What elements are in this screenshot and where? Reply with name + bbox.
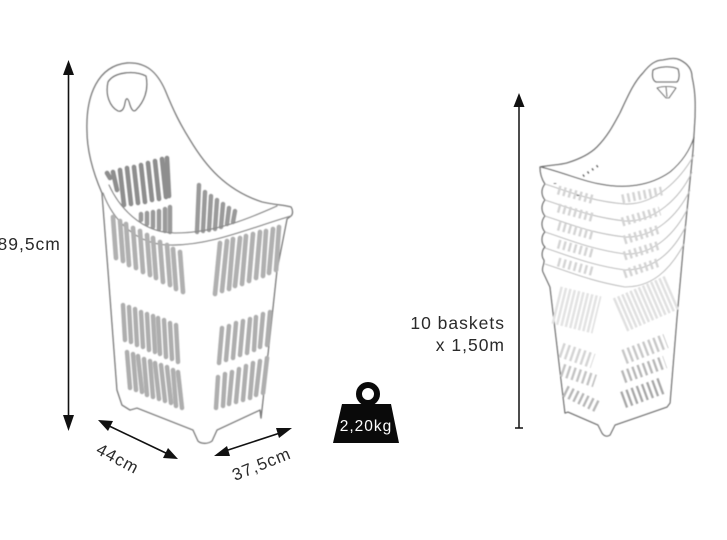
label: stack height: 10 baskets — [410, 313, 505, 333]
label: depth: 44cm — [93, 440, 142, 478]
icon: weight 2,20kg: 2,20kg — [340, 418, 392, 435]
slats: lower left row 3 — [565, 391, 598, 407]
icon: weight 2,20kg — [333, 385, 399, 443]
slats: rim rows — [558, 190, 662, 274]
label: width: 37,5cm — [229, 444, 294, 485]
slats: back upper — [107, 158, 169, 205]
arrow: stack height — [514, 93, 524, 428]
arrow: height 89,5cm — [63, 60, 74, 431]
slats: lower left band 1 — [123, 305, 178, 362]
basket stack: ten nested baskets — [540, 58, 695, 436]
label: stack height: x 1,50m — [436, 335, 505, 355]
slats: front left upper — [113, 217, 183, 292]
slats: lower right band 2 — [216, 358, 267, 408]
lower rims — [545, 155, 694, 287]
slats: lower left band 2 — [127, 352, 182, 408]
handle small opening — [657, 86, 676, 98]
slats: lower left rows — [561, 350, 593, 361]
arrow: width 37,5cm — [214, 428, 292, 456]
slats: lower right rows — [624, 341, 666, 357]
slats: upper left block — [556, 305, 597, 315]
basket outline — [87, 63, 292, 443]
slats: side inner — [197, 185, 235, 232]
basket: single unit, side view — [87, 63, 292, 443]
arrow: depth 44cm — [98, 420, 178, 459]
handle hole — [652, 67, 679, 82]
slats: lower right row 3 — [623, 385, 664, 400]
slats: upper right block — [620, 292, 673, 315]
rim — [103, 185, 291, 245]
slats: front right upper — [215, 227, 279, 294]
slats: lower right row 2 — [623, 362, 665, 377]
slats: lower right band 1 — [219, 312, 270, 363]
stack outline — [540, 58, 695, 436]
slats: back lower — [141, 207, 170, 232]
slats: lower left row 2 — [562, 370, 595, 381]
stack holes dots — [555, 165, 599, 196]
nested rims — [541, 137, 694, 186]
handle hole — [107, 73, 147, 111]
